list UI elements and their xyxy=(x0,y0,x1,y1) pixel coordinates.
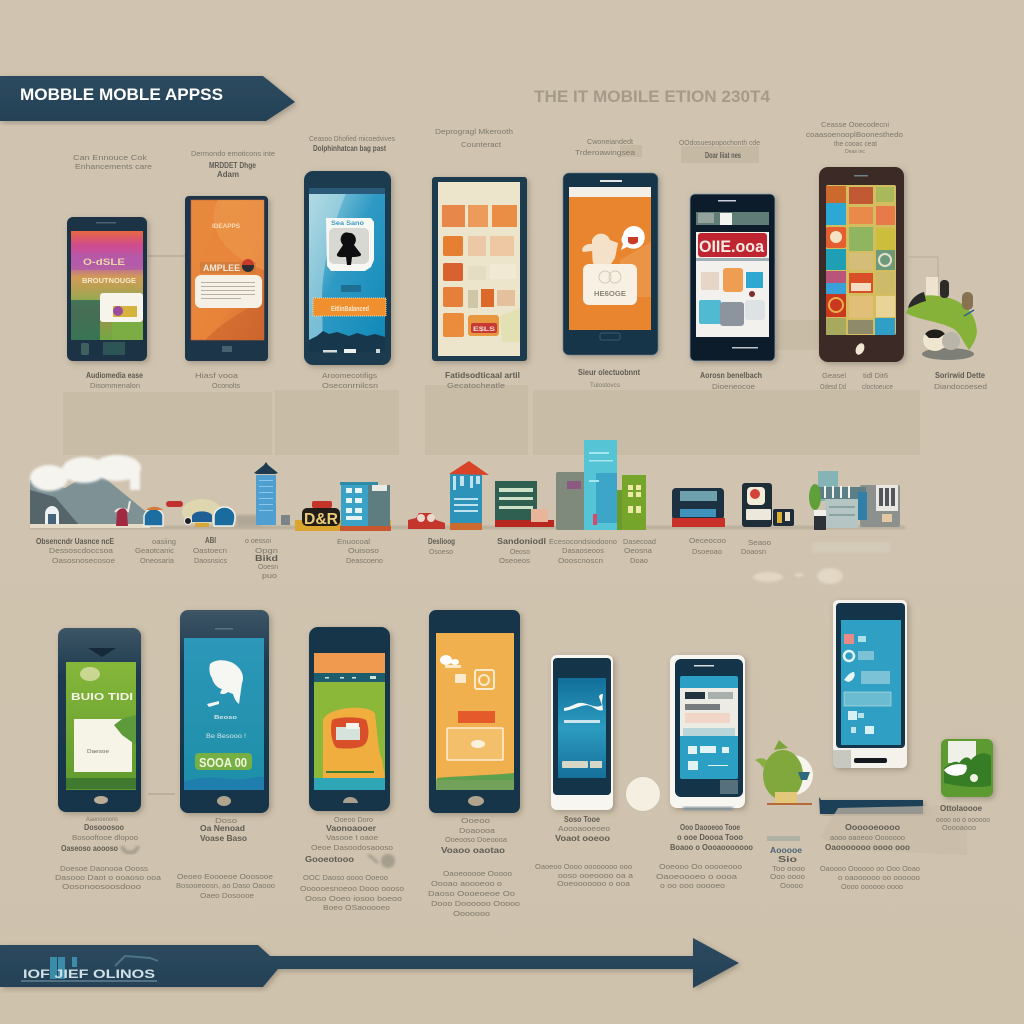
captions above row 1 phones: MRDDET Dhge xyxy=(209,161,256,170)
phone 6 row 1: OIIE.ooa xyxy=(699,237,765,256)
captions below row 3 phones: Sio xyxy=(778,855,797,864)
captions below row 2: Opgn xyxy=(255,546,278,555)
captions below row 3 phones: Boeo OSaooooeo xyxy=(323,903,390,912)
captions below row 3 phones: o oaoooooo oo oooooo xyxy=(838,873,920,882)
captions above row 1 phones: Doar liiat nes xyxy=(705,151,741,160)
captions below row 3 phones: Ooooooo xyxy=(453,909,490,918)
captions below row 3 phones: Boaoo o Oooaooooooo xyxy=(670,843,753,852)
phone 4 row 3 xyxy=(429,610,520,813)
grey caption backdrop xyxy=(820,805,967,855)
captions below row 2: oasiing xyxy=(152,537,176,546)
captions below row 2: Dasecoad xyxy=(623,537,656,546)
captions below row 2: Geaotcanic xyxy=(135,546,174,555)
captions below row 2: Ouisoso xyxy=(348,546,379,555)
captions below row 1 phones: Fatidsodticaal artil xyxy=(445,371,520,380)
captions below row 1 phones: Diandocoesed xyxy=(934,382,987,391)
illustration: building complex xyxy=(809,471,900,530)
captions above row 1 phones: Deprogragl Mkerooth xyxy=(435,127,513,136)
captions above row 1 phones: Can Ennouce Cok xyxy=(73,153,147,162)
captions below row 3 phones: Aoooaooeoeo xyxy=(558,824,610,833)
captions above row 1 phones: Deas inc xyxy=(845,149,866,155)
phone 5 row 3 xyxy=(551,655,613,810)
captions below row 2: o oessoi xyxy=(245,536,271,545)
icon: green mascot xyxy=(906,277,977,360)
phone 3 row 1 xyxy=(304,171,391,365)
captions below row 2: Dessoscdoccsoa xyxy=(49,546,114,555)
captions below row 3 phones: Ooeoo xyxy=(461,816,490,825)
captions below row 2: puo xyxy=(262,571,277,580)
phone 4 row 1 xyxy=(432,177,527,361)
captions above row 1 phones: Trderoawingsea xyxy=(575,148,636,157)
captions below row 2: Oeceocoo xyxy=(689,536,726,545)
captions below row 2: Osoeso xyxy=(429,547,453,556)
captions below row 3 phones: Oooooeoooo xyxy=(845,823,900,832)
captions below row 2: Oneosaria xyxy=(140,556,175,565)
captions below row 3 phones: Doesoe Daonooa Oooss xyxy=(60,864,148,873)
captions below row 2: Obsencndr Uasnce ncE xyxy=(36,537,115,546)
captions below row 3 phones: Oooao aoooeoo o xyxy=(431,879,502,888)
phone 2 row 1: AMPLEE xyxy=(203,263,240,273)
phone 1 row 1 xyxy=(67,217,147,361)
illustration: tall app towers xyxy=(556,440,646,530)
captions below row 3 phones: Oaeo Dosoooe xyxy=(200,891,254,900)
captions below row 2: Daosnsics xyxy=(194,556,227,565)
captions below row 2: Seaoo xyxy=(748,538,771,547)
illustration: blue tower xyxy=(254,462,290,525)
icon: white elephant xyxy=(207,660,243,707)
illustration: shop block xyxy=(295,482,391,531)
captions above row 1 phones: coaasoenooplBoonesthedo xyxy=(806,130,903,139)
captions below row 3 phones: Oaoeooooe Ooooo xyxy=(443,869,512,878)
phone 1 row 1: O-dSLE xyxy=(83,257,125,267)
captions below row 1 phones: Audiomedia ease xyxy=(86,371,143,380)
captions above row 1 phones: Dermondo emoticons inte xyxy=(191,149,275,158)
captions below row 3 phones: Oaoeoooeo o oooa xyxy=(656,872,738,881)
captions above row 1 phones: Dolphinhatcan bag past xyxy=(313,144,386,153)
captions below row 3 phones: Soso Tooe xyxy=(564,815,600,824)
captions below row 1 phones: Odesd Dd xyxy=(820,382,846,391)
captions below row 3 phones: Too oooo xyxy=(772,864,805,873)
captions below row 3 phones: OOC Daoso oooo Ooeoo xyxy=(303,873,388,882)
illustration: snowy mountains xyxy=(30,455,150,528)
captions below row 3 phones: Oaseoso aoooso xyxy=(61,844,118,853)
captions below row 3 phones: oooo oo o oooooo xyxy=(936,815,990,824)
phone 1 row 1: BROUTNOUGE xyxy=(82,278,136,285)
connector line row 3 xyxy=(148,793,175,795)
captions below row 3 phones: Oosonoosoosdooo xyxy=(62,882,141,891)
captions below row 3 phones: Voaot ooeoo xyxy=(555,834,610,843)
banner title text: MOBBLE MOBLE APPSS xyxy=(20,85,223,104)
captions below row 1 phones: Aorosn benelbach xyxy=(700,371,762,380)
shaded backdrop blocks xyxy=(63,320,920,455)
arrow banner text: IOF JIEF OLINOS xyxy=(23,967,155,981)
illustration: shop block: D&R xyxy=(304,511,338,528)
captions below row 3 phones: o oo ooo ooooeo xyxy=(660,881,725,890)
phone 1 row 3 xyxy=(58,628,141,812)
captions below row 1 phones: Hiasf vooa xyxy=(195,371,239,380)
phone 6 row 1 xyxy=(690,194,775,361)
illustration: red car and red roof house xyxy=(408,461,489,530)
captions below row 1 phones: Geasel xyxy=(822,371,846,380)
captions below row 3 phones: Ooooo xyxy=(780,881,803,890)
captions below row 3 phones: Oeoe Dasoodosaooso xyxy=(311,843,393,852)
captions below row 2: Oastoecn xyxy=(193,546,227,555)
mascot graphic xyxy=(582,226,645,267)
illustration: green board xyxy=(495,481,554,527)
phone 7 row 1 xyxy=(819,167,904,362)
phone 5 row 1 xyxy=(563,173,658,355)
captions below row 3 phones: o ooe Doooa Tooo xyxy=(677,833,743,842)
captions above row 1 phones: OOdosuespopochonth cde xyxy=(679,138,760,147)
captions below row 3 phones: Oooooesnoeoo Dooo oooso xyxy=(300,884,404,893)
captions below row 3 phones: Ooeooso Doeoooa xyxy=(445,835,508,844)
captions above row 1 phones: the cooac ceat xyxy=(834,139,878,148)
phone 2 row 3: SOOA 00 xyxy=(199,755,247,770)
captions above row 1 phones: Counteract xyxy=(461,140,502,149)
captions below row 3 phones: Doso xyxy=(215,816,237,825)
captions above row 1 phones: Ceasoo Dhofied micoedvives xyxy=(309,134,395,143)
captions below row 2: Oooscnoscn xyxy=(558,556,603,565)
captions below row 2 xyxy=(36,536,771,580)
captions below row 3 phones: Ooeooooooo o ooa xyxy=(557,879,631,888)
captions below row 3 phones: Gooeotooo xyxy=(305,855,354,864)
captions below row 3 phones: Doaoooa xyxy=(459,826,496,835)
captions below row 1 phones: Oseconrnilcsn xyxy=(322,381,378,390)
bottom timeline arrow xyxy=(0,938,739,988)
captions below row 2: Oeoso xyxy=(510,547,530,556)
captions below row 1 phones: Gecatocheatle xyxy=(447,381,505,390)
captions below row 1 phones: Disommenalon xyxy=(90,381,140,390)
phone 5 row 1: HE6OGE xyxy=(594,291,626,298)
dark bar label xyxy=(819,797,923,814)
captions below row 2: Doao xyxy=(630,556,648,565)
middle timeline shelf xyxy=(30,526,905,529)
ball xyxy=(626,776,660,812)
phone 2 row 1: IDEAPPS xyxy=(212,224,240,230)
captions below row 1 phones: Tulostovcs xyxy=(590,383,620,389)
captions below row 1 phones xyxy=(86,368,987,391)
captions below row 2: Ecesocondsiodoono xyxy=(549,537,617,546)
captions below row 3 phones: Oa Nenoad xyxy=(200,824,245,833)
captions below row 1 phones: Dioeneocoe xyxy=(712,382,755,391)
captions above row 1 phones: Ceasse Ooecodecni xyxy=(821,120,889,129)
illustration: dark device xyxy=(672,488,725,527)
captions below row 2: Ooesn xyxy=(258,562,278,571)
captions above row 1 phones: Adam xyxy=(217,170,239,179)
captions below row 3 phones: Bosooeoosn, ao Daso Oaooo xyxy=(176,881,275,890)
captions below row 1 phones: tidl Dit6 xyxy=(863,371,888,380)
phone 3 row 3 xyxy=(309,627,390,811)
phone 7 row 3 xyxy=(833,600,907,768)
captions below row 2: Bikd xyxy=(255,554,278,563)
captions below row 3 phones: Voase Baso xyxy=(200,834,247,843)
phone 4 row 1: E$LS xyxy=(473,327,495,333)
captions below row 3 phones: Oeoeo Eoooeoe Ooosooe xyxy=(177,872,273,881)
captions below row 3 phones: Ooeooo Oo ooooeooo xyxy=(659,862,742,871)
phone 3 row 1: Eitlin​Balanced xyxy=(331,306,369,313)
captions below row 2: Oseoeos xyxy=(499,556,530,565)
arrow banner icon skyline xyxy=(21,956,158,981)
captions below row 2: ABI xyxy=(205,536,216,545)
captions below row 3 phones: Ooo Daooeoo Tooe xyxy=(680,823,740,832)
subtitle: THE IT MOBILE ETION 230T4 xyxy=(534,87,771,106)
phone 2 row 3 xyxy=(180,610,269,813)
top title banner xyxy=(0,76,295,121)
captions below row 3 phones: Oaooooooo oooo ooo xyxy=(825,843,910,852)
captions below row 3 phones: Oooo oooooo oooo xyxy=(841,882,903,891)
captions below row 1 phones: Sorirwid Dette xyxy=(935,371,986,380)
captions below row 2: Doaosn xyxy=(741,547,766,556)
phone 2 row 1 xyxy=(185,196,268,361)
captions below row 3 phones: Ooso Ooeo iosoo boeoo xyxy=(305,894,402,903)
phone 1 row 3: BUIO TIDI xyxy=(71,692,133,703)
connector outline to mascot xyxy=(904,257,938,285)
captions below row 3 phones: Dosooosoo xyxy=(84,823,124,832)
phone 6 row 3 xyxy=(670,655,745,810)
captions below row 1 phones: Aroomecotifigs xyxy=(322,371,377,380)
connector line xyxy=(147,255,185,257)
captions below row 3 phones: Dooo Doooooo Ooooo xyxy=(431,899,520,908)
captions above row 1 phones: Cwoneiandedt xyxy=(587,137,634,146)
captions below row 2: Enuocoal xyxy=(337,537,370,546)
captions below row 1 phones: cloctoeuce xyxy=(862,382,893,391)
captions below row 2: Deslioog xyxy=(428,537,455,546)
phone 1 row 3: Daesoe xyxy=(87,749,109,755)
captions below row 3 phones: ooso ooeoooo oa a xyxy=(558,871,634,880)
captions below row 3 phones: Bosooftooe dlopoo xyxy=(72,833,138,842)
captions above row 1 phones: Enhancements care xyxy=(75,162,152,171)
phone 2 row 3: Beoso xyxy=(214,715,238,721)
captions below row 1 phones: Oconolts xyxy=(212,381,240,390)
photo card: Sea Sano xyxy=(331,221,364,227)
captions below row 3 phones xyxy=(55,804,990,918)
captions above row 1 phones xyxy=(73,120,903,179)
captions below row 2: Sandoniodl xyxy=(497,537,546,546)
captions below row 3 phones: Daoso Oooeoeoe Oo xyxy=(428,889,515,898)
captions below row 3 phones: Dasooo Daot o ooaoso ooa xyxy=(55,873,162,882)
captions below row 2: Dsoeoao xyxy=(692,547,722,556)
captions below row 2: Oeosna xyxy=(624,546,653,555)
captions below row 3 phones: Ooeoo Doro xyxy=(334,815,373,824)
illustration: app tiles xyxy=(742,483,794,527)
captions below row 2: Dasaoseoos xyxy=(562,546,604,555)
app icon: green tile xyxy=(941,739,993,797)
captions below row 3 phones: Oaoeoo Oooo oooooooo ooo xyxy=(535,862,632,871)
captions below row 3 phones: Voaoo oaotao xyxy=(441,846,505,855)
captions below row 3 phones: Ooooaooo xyxy=(942,823,976,832)
icon: green pear mascot xyxy=(755,740,813,805)
captions below row 1 phones: Sieur olectuobnnt xyxy=(578,368,640,377)
phone 2 row 3: Be Besooo ! xyxy=(206,734,246,740)
captions below row 3 phones: Aooooe xyxy=(770,846,803,855)
photo card xyxy=(326,218,374,271)
pale paint blobs xyxy=(753,542,890,584)
captions below row 3 phones: Ottolaoooe xyxy=(940,804,983,813)
captions below row 3 phones: Vasooe t oaoe xyxy=(326,833,378,842)
captions below row 3 phones: aooo oaoeoo Ooooooo xyxy=(830,833,905,842)
captions below row 3 phones: Aaenoenons xyxy=(86,817,118,823)
captions below row 2: Deascoeno xyxy=(346,556,383,565)
captions below row 2: Oasosnosecosoe xyxy=(52,556,115,565)
illustration: vehicles and domes xyxy=(115,499,262,527)
captions below row 3 phones: Vaonoaooer xyxy=(326,824,376,833)
captions below row 3 phones: Oaoooo Oooooo oo Ooo Ooao xyxy=(820,864,920,873)
captions below row 3 phones: Ooo oooo xyxy=(770,872,805,881)
